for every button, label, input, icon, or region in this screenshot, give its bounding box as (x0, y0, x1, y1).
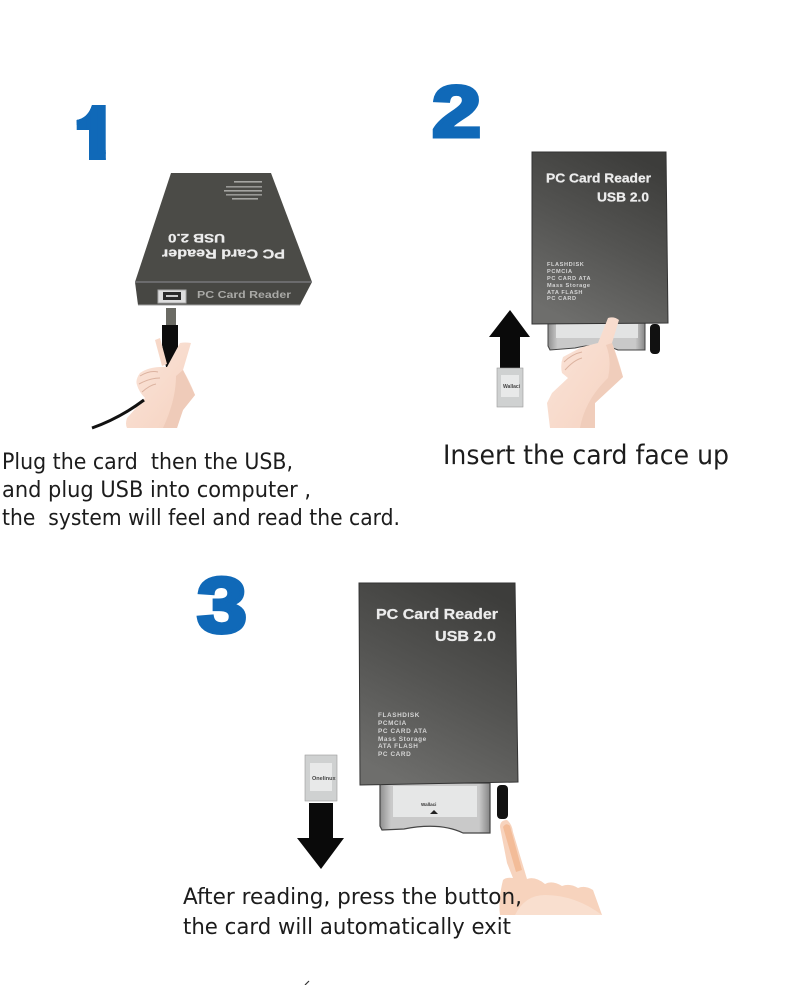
upside-down device label: PC Card Reader (162, 246, 285, 262)
PC card ejected from reader (380, 783, 490, 833)
caption step 2: Insert the card face up (443, 440, 729, 471)
upside-down compatibility list (224, 181, 262, 200)
caption step 3 (183, 885, 522, 940)
panel: step 1 (2, 89, 400, 531)
compatibility list: PCMCIA (378, 720, 407, 727)
upside-down device label: USB 2.0 (168, 231, 225, 245)
device title: PC Card Reader (546, 172, 651, 186)
panel: step 2 (432, 72, 729, 471)
compatibility list: ATA FLASH (547, 290, 583, 296)
pointing finger (499, 820, 602, 915)
small PC card (305, 755, 337, 801)
panel: step 3 (183, 561, 602, 940)
USB port (158, 290, 186, 303)
arrow down (297, 803, 344, 869)
USB cable (92, 400, 144, 428)
PC card ejected from reader: Wallaci (421, 802, 436, 807)
compatibility list: PC CARD (547, 296, 577, 302)
number 1: 1 (70, 89, 114, 177)
small PC card (497, 368, 523, 407)
device subtitle: USB 2.0 (597, 190, 649, 204)
number 3: 3 (197, 561, 247, 649)
compatibility list (378, 712, 427, 758)
compatibility list: FLASHDISK (378, 712, 420, 719)
caption step 1 (2, 450, 400, 531)
compatibility list: Mass Storage (378, 736, 427, 743)
USB plug (162, 308, 178, 367)
arrow up (489, 310, 530, 368)
compatibility list: Mass Storage (547, 283, 591, 289)
small PC card: Onelinux (312, 776, 336, 782)
number 2: 2 (432, 72, 481, 153)
front label: PC Card Reader (197, 290, 291, 301)
device: reader front face (532, 152, 668, 324)
device: reader front face (359, 583, 518, 785)
compatibility list: ATA FLASH (378, 743, 418, 750)
eject button (497, 785, 508, 819)
upside-down device label (162, 231, 285, 262)
compatibility list: PC CARD ATA (378, 728, 427, 735)
stray mark at bottom edge (305, 981, 309, 985)
caption step 1: Plug the card then the USB, (2, 450, 293, 475)
number 1 (76, 105, 106, 160)
compatibility list: PCMCIA (547, 269, 573, 275)
compatibility list: PC CARD (378, 751, 411, 758)
device title: PC Card Reader (376, 607, 498, 623)
hand holding plug (126, 338, 195, 428)
caption step 1: the system will feel and read the card. (2, 506, 400, 531)
small PC card: Wallaci (503, 384, 521, 390)
compatibility list: FLASHDISK (547, 262, 584, 268)
compatibility list (547, 262, 591, 302)
hand inserting card (547, 317, 623, 428)
device subtitle: USB 2.0 (435, 628, 496, 645)
caption step 3: After reading, press the button, (183, 885, 522, 910)
caption step 3: the card will automatically exit (183, 915, 511, 940)
eject button (650, 324, 660, 354)
device: reader seen from the USB end (135, 173, 312, 305)
PC card sticking out of reader (548, 322, 645, 350)
caption step 1: and plug USB into computer , (2, 478, 311, 503)
compatibility list: PC CARD ATA (547, 276, 591, 282)
